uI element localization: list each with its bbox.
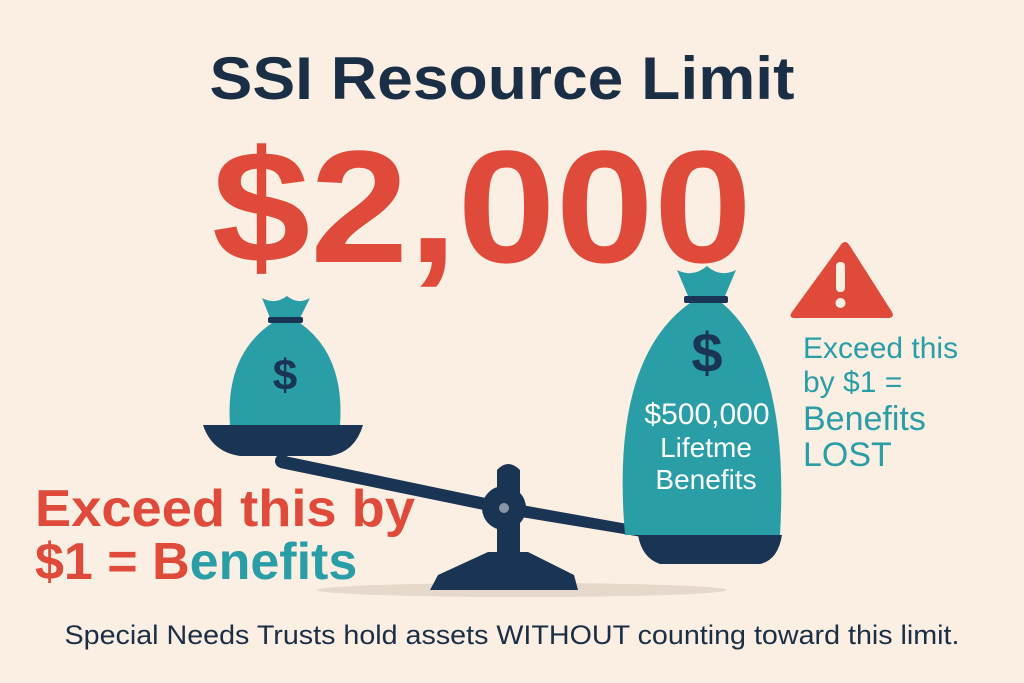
callout: right warning text: Benefits	[803, 400, 926, 438]
callout: right warning text	[803, 332, 958, 474]
scale	[203, 425, 782, 590]
left pan	[203, 425, 363, 456]
callout: right warning text: by $1 =	[803, 366, 902, 399]
shadow under scale	[317, 583, 727, 597]
callout: left warning text: $1 = Benefits	[35, 533, 357, 591]
icon: large money bag: $500,000	[644, 398, 770, 431]
callout: left warning text: Exceed this by	[35, 480, 415, 538]
icon: large money bag: Lifetme	[660, 432, 752, 463]
big number $2,000: $2,000	[212, 117, 752, 296]
callout: right warning text: LOST	[803, 436, 892, 474]
callout: left warning text	[35, 480, 415, 591]
callout: right warning text: Exceed this	[803, 332, 958, 365]
icon: large money bag: $	[691, 321, 723, 384]
base	[430, 464, 578, 590]
footer text: Special Needs Trusts hold assets WITHOUT counting toward this limit.	[64, 620, 960, 650]
icon: small money bag	[230, 296, 340, 425]
beam	[280, 455, 650, 538]
pivot	[482, 486, 526, 530]
icon: warning triangle	[791, 242, 893, 318]
icon: large money bag	[623, 266, 781, 535]
title: SSI Resource Limit	[210, 45, 795, 112]
icon: small money bag: $	[273, 351, 297, 400]
icon: large money bag: Benefits	[655, 464, 757, 495]
right pan	[638, 535, 782, 564]
